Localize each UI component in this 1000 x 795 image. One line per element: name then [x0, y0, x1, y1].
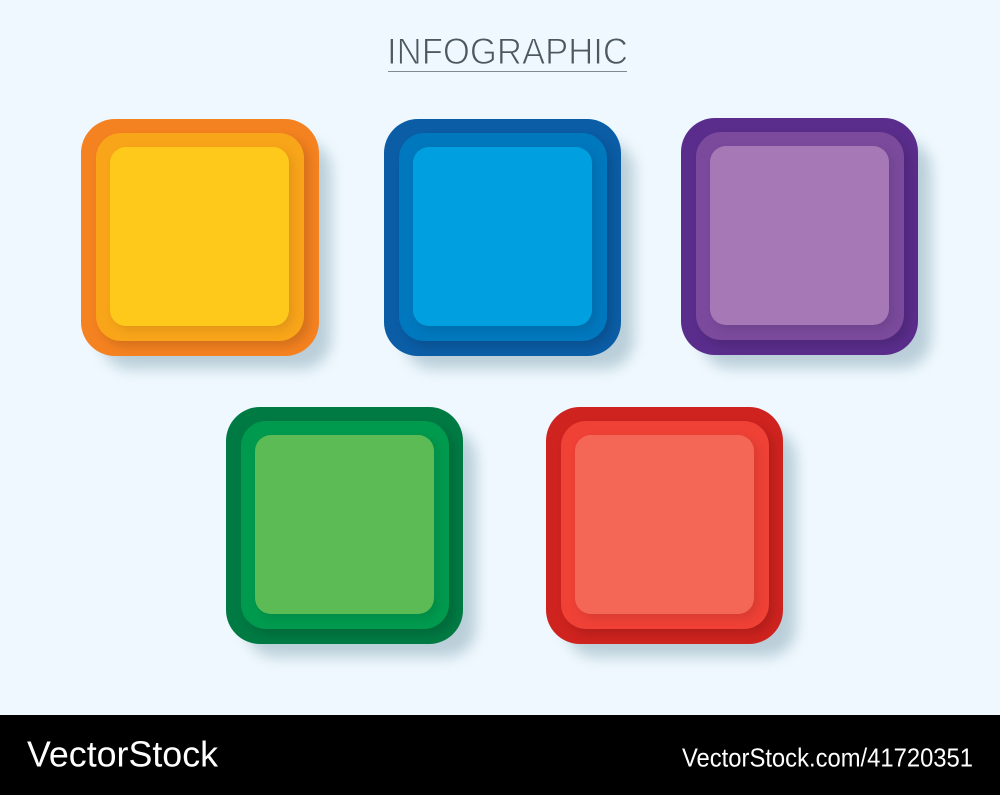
watermark text: VectorStock — [27, 734, 219, 774]
panel: green square — [226, 407, 483, 664]
panel: blue square — [384, 119, 641, 376]
panel: red square — [546, 407, 803, 664]
footer bar — [0, 715, 1000, 795]
panel: purple square — [681, 118, 938, 375]
title: INFOGRAPHIC — [387, 30, 628, 72]
watermark text: VectorStock.com/41720351 — [682, 742, 973, 772]
watermark text — [27, 734, 973, 774]
panel: orange square — [81, 119, 338, 376]
